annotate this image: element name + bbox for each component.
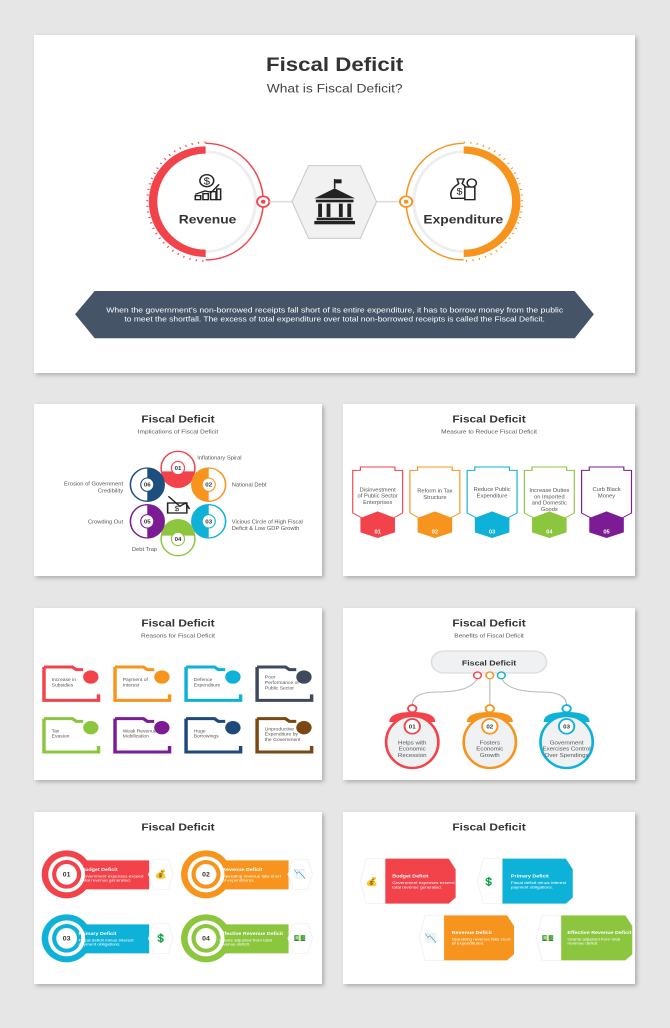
shield cards: Structure [423, 495, 447, 501]
item 01 budget deficit: Government expenses exceed [81, 874, 144, 878]
slide: measures to reduce [343, 404, 635, 576]
reason cards: Weak Revenue [123, 729, 157, 733]
connector lines [269, 199, 400, 204]
benefit circles: Fosters [480, 741, 500, 746]
card primary deficit: payment obligations. [511, 885, 553, 889]
shield cards: 03 [489, 530, 495, 536]
benefit circles: 03 [563, 725, 570, 730]
item 01 budget deficit: 💰 [155, 869, 167, 880]
icon: declining dollar: $ [175, 505, 180, 513]
title: Fiscal Deficit [266, 54, 403, 76]
slide: what is fiscal deficit [34, 35, 635, 373]
benefit circles: Government [550, 741, 584, 746]
benefit circles [386, 705, 593, 768]
card primary deficit: 💲 [483, 876, 495, 887]
item 03 primary deficit: 03 [63, 936, 71, 943]
shield cards: 05 [603, 530, 610, 536]
labels: Credibility [98, 489, 123, 494]
item 04 effective revenue deficit [181, 914, 312, 962]
item 04 effective revenue deficit: Effective Revenue Deficit [219, 931, 283, 937]
shield cards: 01 [374, 530, 381, 536]
item 02 revenue deficit [181, 850, 312, 898]
item 03 primary deficit: Primary Deficit [79, 931, 117, 937]
item 01 budget deficit: Budget Deficit [81, 867, 118, 873]
shield cards: Enterprises [363, 500, 393, 506]
benefit circles: Recession [398, 753, 427, 759]
labels: National Debt [232, 483, 267, 489]
shield cards: Disinvestment [360, 488, 396, 493]
hex circle diagram: 02 [205, 483, 212, 489]
slide: deficit types (cards): Fiscal Deficit [452, 822, 526, 833]
shield cards: Expenditure [477, 494, 507, 499]
reason cards [44, 667, 312, 752]
card budget deficit: 💰 [366, 876, 378, 887]
reason cards: Payment of [123, 677, 149, 682]
reason cards: Expenditure by [265, 732, 299, 737]
item 02 revenue deficit: 02 [202, 872, 210, 879]
card revenue deficit: Operating revenue falls short [452, 937, 512, 941]
reason cards: Defence [194, 677, 213, 682]
item 03 primary deficit: payment obligations. [79, 942, 121, 947]
reason cards: Unproductive [265, 727, 295, 731]
icon: money growth: $ [204, 176, 210, 187]
item 04 effective revenue deficit: Grants adjusted from total [219, 938, 272, 942]
shield cards: Money [598, 494, 615, 499]
reason cards: Performance of [265, 680, 300, 685]
slide: reasons [34, 608, 322, 780]
card revenue deficit [419, 915, 514, 960]
card budget deficit: Budget Deficit [392, 874, 429, 880]
hex circle diagram: 01 [175, 466, 182, 472]
card budget deficit: total revenue generated. [392, 885, 442, 889]
hexagon: bank icon [292, 166, 377, 238]
slide: deficit types (rings): Fiscal Deficit [141, 822, 215, 833]
item 02 revenue deficit: of expenditures. [222, 878, 255, 883]
reason cards: Tax [52, 729, 60, 733]
reason cards: Expenditure [194, 683, 221, 687]
shield cards: Curb Black [593, 487, 621, 493]
slide: reasons: Fiscal Deficit [141, 618, 215, 629]
slide: deficit types (cards) [343, 812, 635, 984]
expenditure circle [400, 142, 522, 261]
slide: measures to reduce: Fiscal Deficit [452, 414, 526, 425]
slide: reasons: Reasons for Fiscal Deficit [141, 633, 215, 640]
shield cards [353, 467, 632, 538]
reason cards: Mobilization [123, 734, 149, 739]
benefit circles: 01 [409, 725, 417, 730]
item 01 budget deficit [42, 850, 173, 898]
item 04 effective revenue deficit: revenue deficit. [219, 942, 250, 947]
heading: Fiscal Deficit [141, 414, 215, 425]
labels: Vicious Circle of High Fiscal [232, 520, 303, 526]
reason cards: Subsidies [52, 683, 74, 687]
expenditure circle: Expenditure [423, 213, 503, 226]
slide: benefits: Benefits of Fiscal Deficit [454, 633, 524, 640]
labels: Erosion of Government [64, 482, 124, 488]
item 03 primary deficit [42, 914, 173, 962]
benefit circles: Helps with [398, 741, 426, 746]
benefit circles: Over Spendings [545, 753, 589, 759]
hex circle diagram: 04 [175, 537, 182, 543]
benefit circles: Exercises Control [543, 747, 591, 753]
benefit circles: 02 [486, 725, 493, 730]
icon: money bag calculator: $ [456, 187, 463, 197]
revenue circle [147, 142, 269, 261]
benefit circles: Economic [399, 747, 426, 753]
slide: benefits [343, 608, 635, 780]
item 01 budget deficit: 01 [63, 872, 71, 879]
shield cards: Reform in Tax [417, 489, 453, 495]
card primary deficit: Primary Deficit [511, 874, 549, 880]
subtitle: What is Fiscal Deficit? [267, 81, 403, 95]
banner: definition: When the government's non-borrowed receipts fall short of its entire expenditure, it has to borrow money from the public [106, 306, 563, 314]
reason cards: Poor [265, 675, 276, 680]
shield cards: Reduce Public [474, 487, 511, 493]
reason cards: Interest [123, 683, 140, 687]
item 04 effective revenue deficit: 💵 [294, 934, 307, 943]
shield cards: 04 [546, 530, 553, 536]
shield cards: and Domestic [532, 501, 567, 507]
card revenue deficit: 📉 [424, 933, 437, 944]
revenue circle: Revenue [179, 213, 236, 226]
pill: fiscal deficit [431, 651, 547, 673]
pill: fiscal deficit: Fiscal Deficit [462, 659, 516, 668]
card effective revenue deficit: Grants adjusted from total [567, 937, 620, 941]
benefit circles: Economic [476, 747, 503, 753]
hex circle diagram: 03 [205, 520, 212, 525]
reason cards: Evasion [52, 734, 70, 739]
reason cards: Increase in [52, 677, 76, 682]
card primary deficit [478, 859, 573, 904]
labels: Debt Trap [132, 547, 157, 553]
shield cards: on Imported [534, 495, 565, 500]
item 01 budget deficit: total revenue generated. [81, 878, 131, 883]
item 02 revenue deficit: Revenue Deficit [222, 867, 263, 873]
slide: implications: Implications of Fiscal Deficit [138, 429, 219, 436]
card budget deficit [360, 859, 456, 904]
labels: Inflationary Spiral [197, 456, 242, 461]
card revenue deficit: of expenditures. [452, 941, 484, 946]
slide: measures to reduce: Measure to Reduce Fiscal Deficit [441, 429, 537, 436]
reason cards: the Government [265, 737, 301, 742]
shield cards: 02 [432, 530, 438, 536]
item 04 effective revenue deficit: 04 [202, 936, 210, 943]
item 02 revenue deficit: 📉 [294, 869, 307, 880]
benefit circles: Growth [480, 753, 500, 759]
item 03 primary deficit: 💲 [155, 933, 167, 944]
item 03 primary deficit: Fiscal deficit minus interest [79, 938, 134, 942]
hex circle diagram: 06 [144, 483, 151, 489]
hex circle diagram [130, 451, 226, 556]
hex circle diagram: 05 [144, 520, 152, 525]
shield cards: of Public Sector [358, 494, 398, 500]
slide: implications [34, 404, 322, 576]
banner: definition [75, 291, 594, 338]
card effective revenue deficit: 💵 [542, 934, 554, 943]
banner: definition: to meet the shortfall. The excess of total expenditure over total non-borrowed receipts is called the Fiscal Deficit. [124, 315, 545, 323]
icon: declining dollar [168, 496, 190, 513]
card revenue deficit: Revenue Deficit [452, 930, 492, 936]
card effective revenue deficit [536, 915, 632, 960]
card budget deficit: Government expenses exceed [392, 880, 455, 885]
card effective revenue deficit: Effective Revenue Deficit [567, 930, 632, 936]
card primary deficit: Fiscal deficit minus interest [511, 880, 567, 885]
shield cards: Goods [541, 507, 558, 513]
reason cards: Public Sector [265, 686, 295, 690]
labels: Deficit & Low GDP Growth [232, 526, 299, 532]
card effective revenue deficit: revenue deficit. [567, 941, 598, 946]
labels: Crowding Out [88, 520, 124, 526]
slide: benefits: Fiscal Deficit [452, 618, 526, 629]
connectors [412, 678, 567, 705]
slide: deficit types (rings) [34, 812, 322, 984]
labels [64, 456, 303, 553]
shield cards: Increase Duties [529, 488, 570, 494]
item 02 revenue deficit: Operating revenue falls short [222, 874, 282, 878]
reason cards: Huge [194, 729, 206, 733]
reason cards: Borrowings [194, 734, 219, 739]
